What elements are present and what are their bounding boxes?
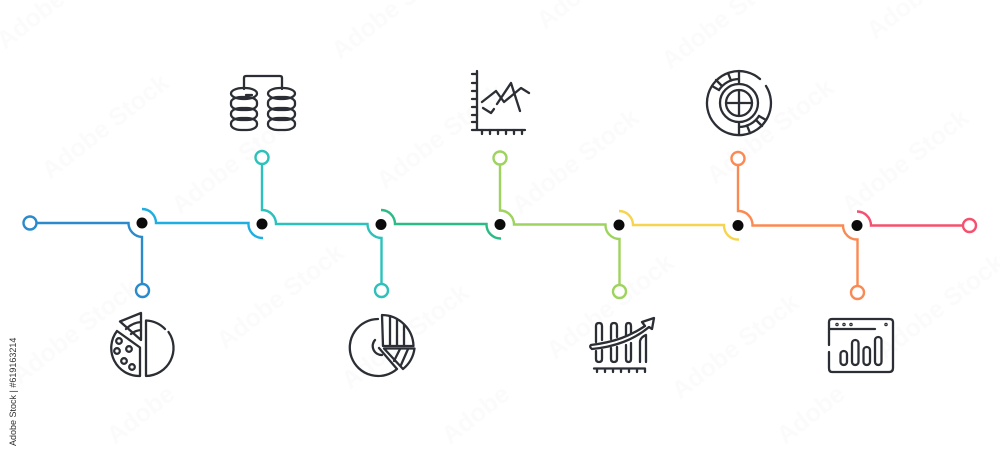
credit text: Adobe Stock | #619163214 [8, 338, 18, 446]
segment: yellow connector [619, 211, 739, 240]
icon: rising bars with arrow [590, 318, 654, 372]
text: Adobe Stock [336, 279, 474, 395]
icon: pie chart with hatched slices [350, 315, 414, 376]
timeline [24, 151, 976, 299]
text: Adobe Stock [541, 249, 679, 365]
text: Adobe Stock [836, 104, 974, 220]
segment: cyan connector [142, 209, 263, 238]
text: Adobe Stock [211, 239, 349, 355]
node dots [136, 218, 862, 231]
text: Adobe Stock [666, 289, 804, 405]
segment: green connector [381, 210, 501, 239]
text: Adobe [101, 380, 180, 450]
segment: pink end [857, 212, 976, 232]
text: Adobe [436, 380, 515, 450]
text: Adobe Stock [506, 104, 644, 220]
segment: blue start with branch [24, 216, 149, 297]
icon: browser window with bar chart [829, 319, 893, 372]
segment: teal with branches [256, 151, 388, 297]
text: Adobe Stock [36, 69, 174, 185]
icon: target ring chart [707, 71, 771, 135]
segment: lime with branches [494, 152, 626, 298]
icon: linked coin stacks [231, 76, 295, 130]
icons [111, 71, 893, 376]
segment: orange with branches [732, 152, 864, 299]
text: Adobe Stock [701, 74, 839, 190]
text: Adobe Stock [371, 79, 509, 195]
text: Adobe Stock [6, 274, 144, 390]
icon: line graph on axes [472, 71, 529, 134]
text: Adobe Stock [166, 104, 304, 220]
icon: divided pie chart [111, 313, 174, 376]
text: Adobe [771, 380, 850, 450]
